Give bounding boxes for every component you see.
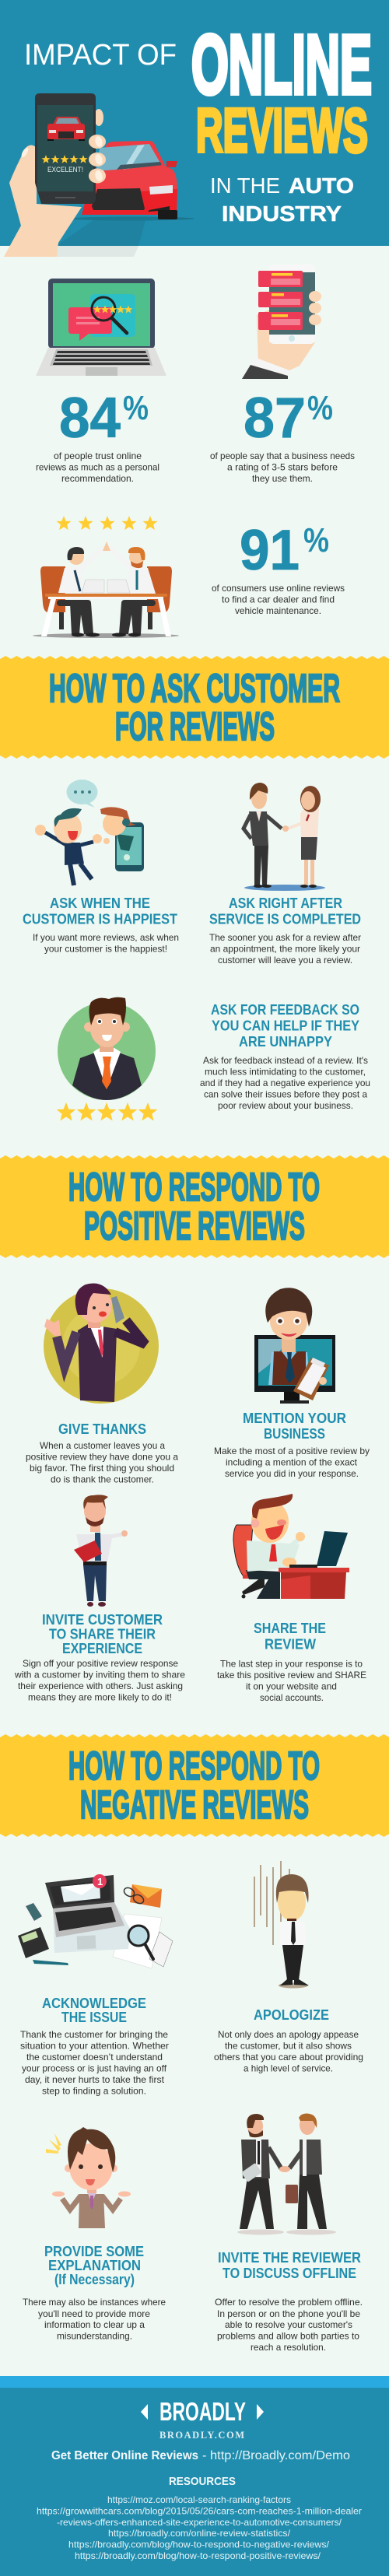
- text block: vehicle maintenance.: [235, 605, 321, 616]
- logo: Broadly: BROADLY.COM: [159, 2430, 244, 2441]
- heading: ASK FOR FEEDBACK SO: [211, 1002, 359, 1018]
- text block: If you want more reviews, ask when: [33, 932, 179, 943]
- heading banner: negative reviews: [0, 1734, 389, 1837]
- title: IN THE: [210, 173, 280, 198]
- text block: [20, 2029, 169, 2096]
- call to action: -: [202, 2449, 206, 2462]
- text block: The last step in your response is to: [220, 1659, 363, 1670]
- panel: stat 84%: [36, 279, 166, 484]
- text block: situation to your attention. Whether: [20, 2040, 169, 2051]
- text block: of people trust online: [54, 450, 142, 461]
- panel: ask when happiest: [23, 780, 179, 954]
- text block: social accounts.: [260, 1692, 324, 1703]
- text block: [215, 2297, 363, 2353]
- icon: man with red folder: [74, 1495, 128, 1607]
- heading: resources: RESOURCES: [169, 2475, 236, 2488]
- heading banner: how to ask: FOR REVIEWS: [115, 704, 275, 748]
- panel: mention your business: [214, 1288, 370, 1479]
- statistic number: 91: [240, 519, 300, 582]
- heading: PROVIDE SOME: [44, 2244, 144, 2259]
- text block: an appointment, the more likely your: [210, 943, 360, 954]
- icon: man explaining with open hands: [46, 2127, 131, 2228]
- icon: red car with reflection: [51, 141, 194, 257]
- text block: day, it never hurts to take the first: [25, 2074, 165, 2085]
- resource links: https://moz.com/local-search-ranking-factors: [107, 2494, 291, 2505]
- text block: big favor. The first thing you should: [30, 1463, 174, 1474]
- call to action: [51, 2449, 350, 2462]
- text block: misunderstanding.: [57, 2331, 132, 2342]
- text block: information to clear up a: [44, 2319, 145, 2330]
- heading: SHARE THE: [254, 1621, 326, 1636]
- heading: APOLOGIZE: [254, 2007, 329, 2023]
- text block: [214, 1446, 370, 1479]
- panel: hero header: [0, 0, 389, 257]
- icon: smiling man in green circle with stars: [57, 997, 157, 1121]
- text block: [217, 1659, 366, 1703]
- heading: ARE UNHAPPY: [239, 1034, 332, 1050]
- text block: a high level of service.: [244, 2063, 333, 2074]
- text block: customer will leave you a review.: [218, 955, 352, 966]
- resource links: https://growwithcars.com/blog/2015/05/26/cars-com-reaches-1-million-dealer: [37, 2505, 362, 2516]
- resource links: https://broadly.com/blog/how-to-respond-positive-reviews/: [75, 2550, 321, 2561]
- text block: your process or is just having an off: [22, 2063, 167, 2074]
- heading: EXPLANATION: [48, 2258, 141, 2273]
- call to action: Get Better Online Reviews: [51, 2449, 198, 2462]
- icon: hand holding phone: EXCELENT!: [47, 166, 83, 174]
- text block: able to resolve your customer's: [225, 2319, 352, 2330]
- heading: [23, 895, 177, 927]
- heading: [211, 1002, 359, 1050]
- icon: colleagues high-five at table: [33, 541, 179, 638]
- heading: [254, 1621, 326, 1652]
- text block: [210, 450, 355, 484]
- title: AUTO: [289, 173, 354, 198]
- panel: stat 91%: [33, 516, 345, 638]
- text block: [212, 583, 345, 616]
- resource links: https://broadly.com/blog/how-to-respond-to-negative-reviews/: [68, 2539, 330, 2550]
- text block: positive review they have done you a: [26, 1452, 178, 1463]
- resource links: [37, 2494, 362, 2561]
- text block: The sooner you ask for a review after: [209, 932, 361, 943]
- heading: [218, 2250, 361, 2281]
- panel: provide explanation: [23, 2127, 166, 2342]
- heading: [44, 2244, 144, 2287]
- icon: happy customer and phone agent: [35, 780, 144, 885]
- heading banner: positive reviews: [0, 1155, 389, 1258]
- icon: man on phone in yellow circle: [44, 1284, 159, 1404]
- resource links: -reviews-offers-enhanced-site-experience-to-automotive-consumers/: [57, 2517, 342, 2528]
- logo: Broadly: [141, 2397, 264, 2441]
- text block: [200, 1055, 370, 1111]
- mini car on screen: [47, 117, 85, 141]
- text block: step to finding a solution.: [42, 2085, 146, 2096]
- panel: stat 87%: [210, 265, 355, 484]
- heading: [42, 1996, 146, 2025]
- text block: others that you care about providing: [214, 2052, 363, 2063]
- text block: your customer is the happiest!: [44, 943, 167, 954]
- resource links: https://broadly.com/online-review-statistics/: [108, 2528, 291, 2539]
- text block: do is thank the customer.: [51, 1474, 154, 1484]
- icon: hand holding phone: [4, 93, 106, 257]
- text block: take this positive review and SHARE: [217, 1670, 366, 1681]
- text block: service you did in your response.: [225, 1468, 359, 1479]
- text block: Thank the customer for bringing the: [20, 2029, 168, 2040]
- icon: two businessmen shaking hands: [237, 2114, 336, 2234]
- text block: they use them.: [252, 473, 313, 484]
- text block: means they are more likely to do it!: [28, 1691, 172, 1702]
- heading: (If Necessary): [54, 2272, 135, 2287]
- text block: When a customer leaves you a: [40, 1440, 165, 1451]
- text block: and if they had a negative experience you: [200, 1078, 370, 1088]
- title: INDUSTRY: [222, 202, 342, 226]
- text block: can solve their issues before they post a: [204, 1089, 367, 1100]
- text block: of consumers use online reviews: [212, 583, 345, 594]
- statistic number: %: [303, 521, 329, 559]
- text block: Offer to resolve the problem offline.: [215, 2297, 363, 2308]
- panel: ask for feedback: [57, 997, 370, 1121]
- statistic number: %: [307, 389, 333, 427]
- heading: TO DISCUSS OFFLINE: [223, 2266, 356, 2281]
- text block: [209, 932, 361, 966]
- text block: Not only does an apology appease: [218, 2029, 359, 2040]
- heading: ACKNOWLEDGE: [42, 1996, 146, 2011]
- text block: poor review about your business.: [218, 1100, 353, 1111]
- heading: THE ISSUE: [61, 2010, 127, 2025]
- statistic number: 84: [59, 387, 121, 450]
- heading: MENTION YOUR: [243, 1411, 346, 1426]
- heading: [42, 1612, 163, 1656]
- panel: give thanks: [26, 1284, 178, 1484]
- title: IMPACT OF: [24, 39, 177, 72]
- text block: including a mention of the exact: [226, 1456, 358, 1467]
- text block: much less intimidating to the customer,: [205, 1066, 366, 1077]
- heading: INVITE CUSTOMER: [42, 1612, 163, 1628]
- icon: man and woman handshake: [244, 783, 325, 891]
- panel: invite reviewer offline: [215, 2114, 363, 2353]
- text block: [33, 932, 179, 954]
- heading: REVIEW: [265, 1637, 316, 1652]
- rating stars on screen: [41, 155, 88, 163]
- text block: the customer doesn’t understand: [26, 2052, 163, 2063]
- text block: of people say that a business needs: [210, 450, 355, 461]
- icon: laptop with reviews: [36, 279, 166, 376]
- text block: with a customer by inviting them to share: [14, 1670, 185, 1681]
- text block: Sign off your positive review response: [23, 1658, 178, 1669]
- text block: recommendation.: [61, 473, 134, 484]
- statistic number: 87: [244, 387, 306, 450]
- heading: [209, 895, 361, 927]
- text block: problems and allow both parties to: [217, 2331, 359, 2342]
- heading: ASK RIGHT AFTER: [229, 895, 342, 911]
- heading: BUSINESS: [264, 1426, 325, 1442]
- heading banner: how to ask: [0, 656, 389, 759]
- icon: desk with laptop and papers: 1: [97, 1876, 103, 1887]
- panel: invite customer: [14, 1495, 185, 1702]
- text block: There may also be instances where: [23, 2297, 166, 2308]
- panel: share the review: [217, 1494, 366, 1703]
- text block: their experience with others. Just asking: [18, 1681, 183, 1691]
- fingers: [89, 135, 106, 184]
- icon: hand holding phone with review cards: [242, 265, 321, 379]
- call to action: http://Broadly.com/Demo: [210, 2449, 350, 2462]
- text block: [36, 450, 159, 484]
- heading: CUSTOMER IS HAPPIEST: [23, 912, 177, 927]
- heading: ASK WHEN THE: [50, 895, 150, 911]
- text block: it on your website and: [246, 1681, 337, 1691]
- text block: reviews as much as a personal: [36, 462, 159, 473]
- heading: SERVICE IS COMPLETED: [209, 912, 361, 927]
- icon: man in monitor with clipboard: [254, 1288, 335, 1404]
- text block: reach a resolution.: [251, 2342, 326, 2353]
- panel: apologize: [214, 1861, 363, 2074]
- text block: the customer, but it also shows: [225, 2040, 352, 2051]
- panel: footer: [0, 2376, 389, 2576]
- icon: five stars: [56, 516, 157, 530]
- heading: GIVE THANKS: [58, 1421, 146, 1437]
- heading: YOU CAN HELP IF THEY: [212, 1018, 359, 1033]
- text block: to find a car dealer and find: [222, 594, 335, 605]
- heading: INVITE THE REVIEWER: [218, 2250, 361, 2266]
- heading: EXPERIENCE: [62, 1641, 142, 1656]
- icon: man at red desk with laptop: [233, 1494, 349, 1599]
- logo: Broadly: BROADLY: [159, 2397, 246, 2426]
- panel: ask right after service: [209, 783, 361, 966]
- statistic number: %: [123, 389, 149, 427]
- text block: In person or on the phone you'll be: [217, 2308, 360, 2319]
- icon: sad man with falling lines: [254, 1861, 309, 1989]
- text block: you'll need to provide more: [38, 2308, 150, 2319]
- title: [24, 17, 372, 226]
- text block: [14, 1658, 185, 1702]
- text block: Ask for feedback instead of a review. It's: [203, 1055, 368, 1066]
- heading: TO SHARE THEIR: [49, 1626, 156, 1642]
- icon: desk with laptop and papers: [18, 1874, 173, 1968]
- text block: a rating of 3-5 stars before: [227, 462, 338, 473]
- text block: [214, 2029, 363, 2074]
- text block: Make the most of a positive review by: [214, 1446, 370, 1456]
- text block: [23, 2297, 166, 2342]
- text block: [26, 1440, 178, 1484]
- panel: acknowledge the issue: [18, 1874, 173, 2096]
- heading: [243, 1411, 346, 1442]
